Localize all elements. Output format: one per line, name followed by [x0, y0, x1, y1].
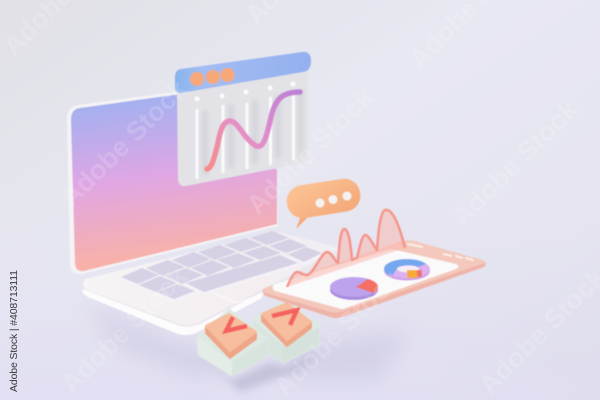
key sides — [121, 253, 322, 302]
laptop — [67, 90, 339, 335]
watermark: Adobe Stock — [55, 261, 194, 399]
analytics panel — [263, 210, 486, 318]
window header — [175, 52, 311, 93]
window control dots — [190, 68, 234, 86]
line curve — [207, 92, 300, 169]
laptop base — [81, 232, 339, 335]
donut chart — [384, 259, 430, 280]
panel base — [263, 240, 486, 318]
side credit text: Adobe Stock | #408713111 — [8, 270, 20, 392]
floating chart window — [175, 52, 311, 186]
laptop screen display — [71, 92, 277, 271]
keyboard — [121, 231, 322, 302]
glass wave chart — [287, 210, 405, 287]
keycap: up — [253, 300, 319, 363]
ground shadows — [90, 305, 410, 380]
watermark: Adobe Stock — [268, 264, 407, 400]
keycap shadows — [200, 350, 322, 392]
laptop screen bezel — [67, 90, 278, 274]
white card — [272, 250, 458, 309]
pie chart — [330, 277, 378, 300]
slider tracks — [194, 82, 303, 179]
window body — [177, 70, 308, 186]
key tops — [121, 231, 322, 299]
bubble dots — [316, 192, 352, 208]
speech bubble — [284, 176, 363, 229]
watermark: Adobe Stock — [241, 82, 380, 220]
watermark: Adobe Stock — [446, 94, 585, 232]
watermark: Adobe Stock — [55, 74, 194, 212]
keycaps — [197, 300, 319, 376]
panel label marks — [408, 244, 473, 260]
keycap: down — [197, 309, 268, 376]
